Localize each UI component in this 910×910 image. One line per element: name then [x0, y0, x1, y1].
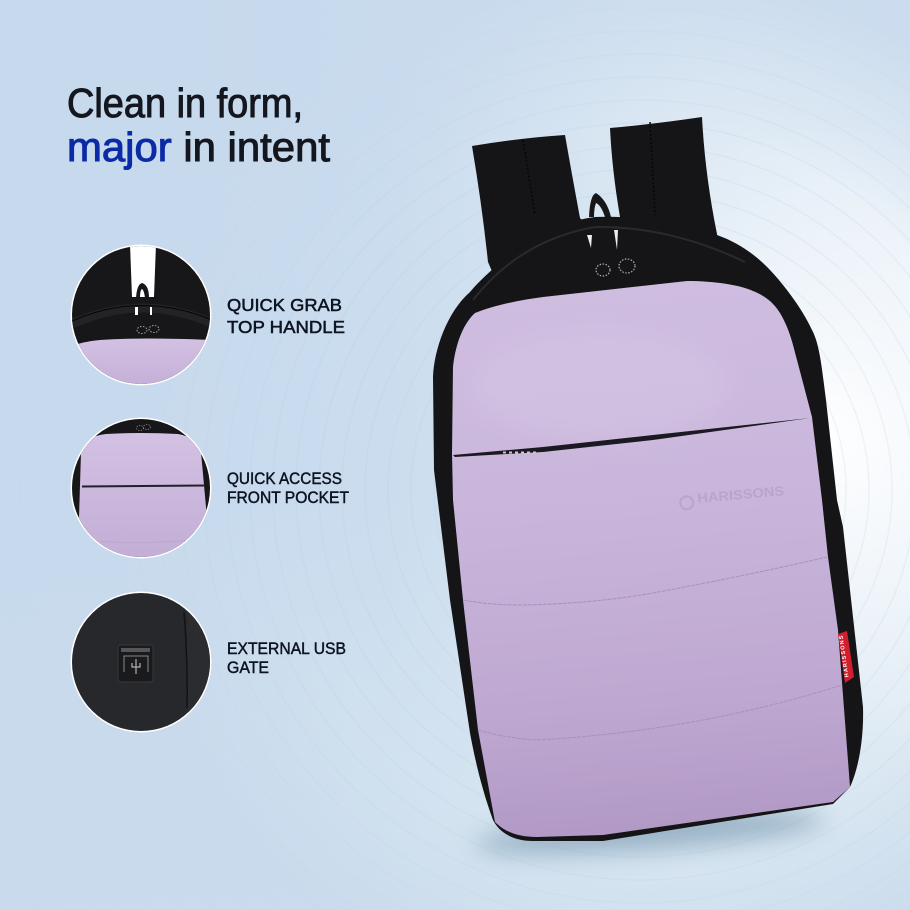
infographic canvas [68, 87, 864, 866]
left shoulder strap [472, 135, 600, 290]
label: EXTERNAL USB [227, 640, 346, 658]
right shoulder strap [610, 117, 720, 260]
label: FRONT POCKET [227, 489, 349, 507]
title line 2: major in intent [67, 124, 331, 170]
handle slits [587, 230, 618, 250]
brand logo: HARISSONS [697, 483, 785, 506]
label: QUICK GRAB [227, 295, 342, 315]
ground shadow [474, 802, 826, 862]
stitched seam upper [463, 557, 827, 605]
stitched seam lower [478, 685, 842, 740]
handle arc detail [473, 227, 745, 300]
label: GATE [227, 659, 269, 677]
zipper pulls [596, 259, 635, 276]
red brand tag: HARISSONS [839, 635, 850, 678]
detail circle: top handle [70, 244, 212, 390]
soft highlight [470, 330, 730, 440]
zipper teeth [503, 452, 536, 454]
feature: quick access front pocket [70, 417, 349, 560]
feature: external usb gate [70, 591, 346, 733]
title [67, 80, 331, 170]
top grab handle loop [589, 193, 611, 217]
brand logo [679, 483, 785, 510]
detail circle: front pocket [70, 417, 212, 560]
label [227, 295, 345, 337]
front pocket zipper [453, 418, 810, 457]
label [227, 470, 349, 507]
detail circle: usb port [70, 591, 212, 733]
lilac front panel [452, 281, 850, 837]
label [227, 640, 346, 677]
label: QUICK ACCESS [227, 470, 342, 488]
back panel body [433, 217, 863, 841]
feature: quick grab top handle [70, 244, 345, 390]
label: TOP HANDLE [227, 317, 345, 337]
strap stitching [523, 122, 655, 215]
red brand tag [838, 631, 854, 683]
title line 1: Clean in form, [67, 80, 303, 126]
backpack product [433, 117, 863, 862]
